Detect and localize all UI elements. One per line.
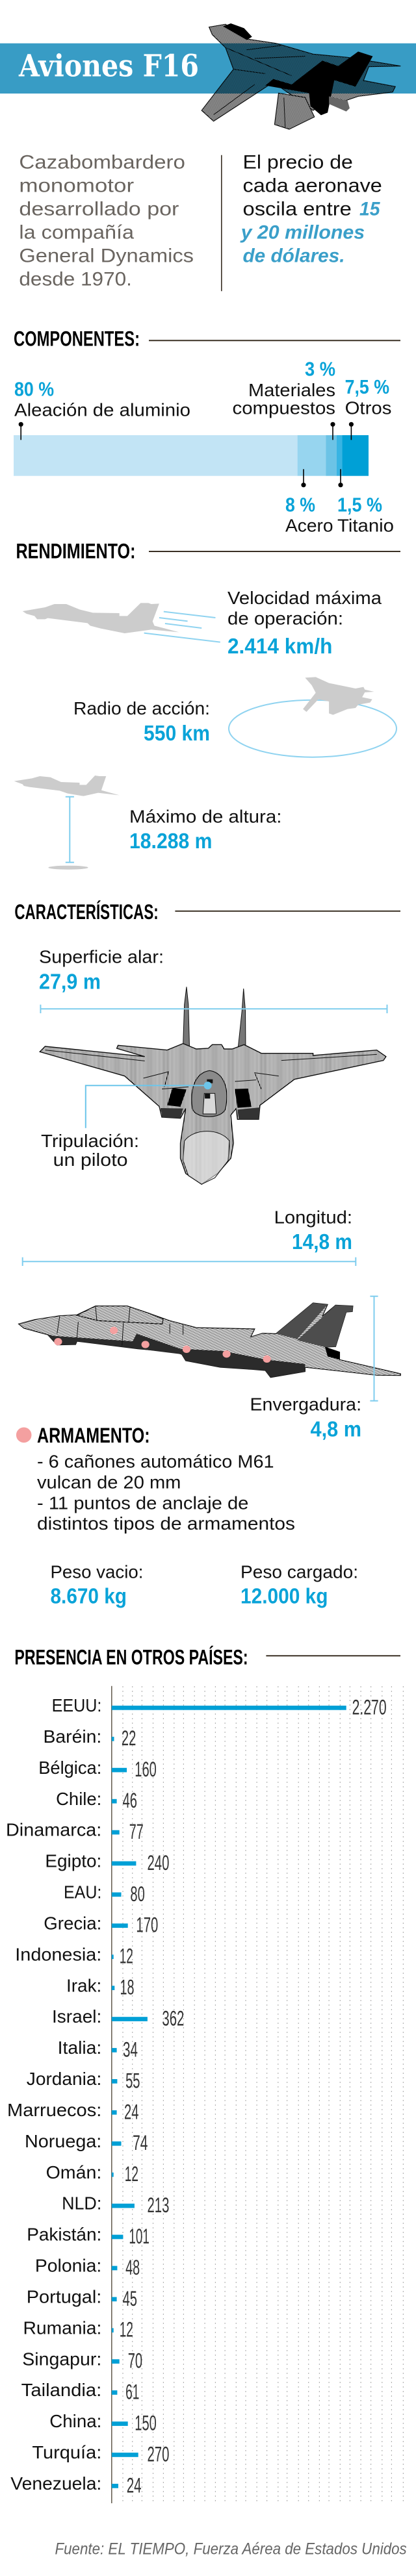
text block: superficie alar: 27,9 m: [39, 970, 101, 994]
text block: radio de accion: Radio de acción:: [73, 698, 210, 718]
text block: envergadura: Envergadura:: [250, 1395, 361, 1415]
text block: peso vacio: 8.670 kg: [51, 1584, 127, 1608]
bar chart: presence by country: Jordania:: [27, 2069, 101, 2089]
label: aluminio: 80 %: [14, 377, 54, 400]
text block: envergadura: 4,8 m: [311, 1417, 361, 1441]
heading: presencia en otros paises: PRESENCIA EN OTROS PAÍSES:: [14, 1646, 248, 1669]
bar chart: presence by country: Grecia:: [44, 1913, 101, 1933]
bar chart: presence by country: Pakistán:: [27, 2225, 101, 2245]
label: titanio: [337, 493, 394, 535]
label: materiales compuestos: 3 %: [305, 357, 335, 380]
label: materiales compuestos: Materiales: [248, 380, 335, 400]
text block: peso cargado: Peso cargado:: [240, 1561, 358, 1582]
bar chart: presence by country: 150: [135, 2411, 157, 2434]
text block: price: oscila entre: [243, 198, 352, 220]
text block: superficie alar: [39, 947, 164, 994]
text block: armamento: [16, 1424, 295, 1534]
bar chart: presence by country: 48: [125, 2256, 140, 2279]
text block: armamento: - 6 cañones automático M61: [37, 1451, 274, 1471]
bar chart: presence by country: 160: [135, 1758, 157, 1781]
bar chart: presence by country: Dinamarca:: [6, 1820, 101, 1840]
text block: armamento: vulcan de 20 mm: [37, 1472, 181, 1493]
callout: tripulacion: Tripulación:: [41, 1131, 139, 1151]
bar chart: presence by country: Egipto:: [45, 1851, 101, 1871]
text block: velocidad: [228, 588, 382, 658]
bar chart: presence by country: Baréin:: [43, 1726, 101, 1747]
bar chart: presence by country: 170: [136, 1913, 158, 1937]
text block: description: desde 1970.: [19, 268, 132, 290]
text block: armamento: - 11 puntos de anclaje de: [37, 1493, 248, 1513]
bar chart: presence by country: Tailandia:: [21, 2380, 101, 2400]
text block: velocidad: 2.414 km/h: [228, 634, 332, 658]
text block: price: de dólares.: [243, 245, 344, 266]
bar chart: presence by country: 80: [130, 1882, 145, 1906]
bar chart: presence by country: 2.270: [352, 1695, 387, 1719]
text block: armamento: distintos tipos de armamentos: [37, 1513, 295, 1534]
bar chart: presence by country: Singapur:: [22, 2349, 101, 2369]
text block: peso cargado: 12.000 kg: [240, 1584, 328, 1608]
icon: jet front view: [40, 987, 386, 1184]
text block: altura: [129, 807, 282, 853]
text block: price: El precio de: [243, 151, 353, 173]
bar chart: presence by country: Portugal:: [27, 2286, 101, 2307]
label: aluminio: [14, 377, 190, 420]
bar chart: presence by country: 101: [129, 2225, 150, 2248]
bar chart: presence by country: Turquía:: [32, 2442, 101, 2462]
bar chart: presence by country: 61: [125, 2380, 139, 2403]
text block: altura: Máximo de altura:: [129, 807, 282, 827]
icon: jet with altitude marker: [14, 776, 120, 870]
bar chart: presence by country: 45: [123, 2287, 137, 2310]
label: acero: [285, 493, 333, 535]
callout: tripulacion: [41, 1081, 212, 1170]
text block: description: monomotor: [19, 175, 134, 196]
text block: peso cargado: [240, 1561, 358, 1608]
heading: rendimiento: RENDIMIENTO:: [16, 539, 135, 562]
dimension: height line: [370, 1296, 378, 1401]
bar chart: presence by country: 12: [120, 1945, 133, 1968]
label: otros: 7,5 %: [345, 375, 389, 398]
bar chart: presence by country: 34: [123, 2038, 138, 2061]
bar chart: presence by country: Venezuela:: [10, 2473, 101, 2494]
text block: armamento: ARMAMENTO:: [37, 1424, 150, 1447]
label: titanio: Titanio: [337, 515, 394, 535]
bar chart: presence by country: Omán:: [46, 2162, 101, 2182]
bar chart: presence by country: [6, 1686, 403, 2503]
bar chart: presence by country: Israel:: [52, 2006, 101, 2027]
text block: altura: 18.288 m: [129, 829, 212, 853]
dimension: wingspan line: [40, 1005, 387, 1013]
bar chart: presence by country: 24: [127, 2473, 142, 2497]
label: acero: 8 %: [285, 493, 315, 516]
bar chart: presence by country: NLD:: [62, 2193, 101, 2214]
bar chart: presence by country: 18: [120, 1976, 134, 1999]
label: titanio: 1,5 %: [337, 493, 382, 516]
icon: jet side view with hardpoints: [19, 1303, 400, 1378]
text block: longitud: Longitud:: [274, 1207, 352, 1227]
heading: componentes: COMPONENTES:: [14, 327, 140, 351]
text block: longitud: 14,8 m: [292, 1230, 352, 1254]
label: otros: Otros: [345, 398, 391, 418]
bar chart: presence by country: Bélgica:: [38, 1758, 101, 1778]
label: materiales compuestos: [233, 357, 335, 418]
bar chart: presence by country: 270: [147, 2442, 169, 2466]
icon: header fighter jet: [202, 23, 400, 129]
bar chart: presence by country: 24: [124, 2100, 138, 2123]
bar chart: presence by country: 74: [133, 2131, 148, 2154]
label: otros: [345, 375, 391, 418]
text block: description: General Dynamics: [19, 245, 194, 266]
text block: description: la compañía: [19, 221, 134, 243]
bar chart: presence by country: 46: [123, 1789, 137, 1812]
bar chart: presence by country: Italia:: [58, 2038, 101, 2058]
title banner: [0, 44, 416, 94]
text block: price: cada aeronave: [243, 175, 382, 196]
callout: tripulacion: un piloto: [53, 1150, 128, 1170]
bar chart: presence by country: EEUU:: [52, 1695, 101, 1715]
text block: radio de accion: [73, 698, 210, 745]
text block: longitud: [274, 1207, 352, 1254]
text block: velocidad: Velocidad máxima: [228, 588, 382, 608]
bar chart: presence by country: Indonesia:: [15, 1944, 101, 1964]
label: acero: Acero: [285, 515, 333, 535]
bar chart: presence by country: Marruecos:: [7, 2100, 101, 2120]
chart: composition stacked bar: [14, 422, 369, 487]
bar chart: presence by country: Irak:: [66, 1975, 101, 1995]
text block: description: desarrollado por: [19, 198, 179, 220]
bar chart: presence by country: 213: [147, 2193, 169, 2217]
text block: price: y 20 millones: [240, 221, 365, 243]
bar chart: presence by country: Rumania:: [23, 2317, 101, 2338]
label: materiales compuestos: compuestos: [233, 398, 335, 418]
text block: superficie alar: Superficie alar:: [39, 947, 164, 967]
title banner: Aviones F16: [18, 48, 199, 84]
bar chart: presence by country: Noruega:: [25, 2131, 101, 2151]
text block: price: [240, 151, 382, 266]
text block: velocidad: de operación:: [228, 609, 343, 629]
bar chart: presence by country: 55: [125, 2069, 140, 2092]
bar chart: presence by country: Polonia:: [35, 2256, 101, 2276]
bar chart: presence by country: 240: [147, 1851, 169, 1875]
bar chart: presence by country: Chile:: [56, 1789, 101, 1809]
text block: envergadura: [250, 1395, 361, 1441]
text block: radio de accion: 550 km: [144, 721, 210, 745]
text block: price: 15: [359, 198, 381, 220]
bar chart: presence by country: 362: [162, 2007, 184, 2030]
heading: caracteristicas: CARACTERÍSTICAS:: [14, 900, 159, 924]
label: aluminio: Aleación de aluminio: [14, 400, 190, 420]
icon: jet circling on ellipse: [229, 677, 396, 757]
text block: description: [19, 151, 194, 290]
bar chart: presence by country: EAU:: [64, 1882, 101, 1902]
icon: jet silhouette with speed lines: [23, 603, 220, 642]
dimension: length line: [23, 1257, 356, 1266]
bar chart: presence by country: 70: [128, 2349, 142, 2373]
bar chart: presence by country: 12: [120, 2318, 133, 2342]
bar chart: presence by country: 12: [125, 2162, 138, 2186]
bar chart: presence by country: China:: [49, 2411, 101, 2431]
text block: peso vacio: Peso vacio:: [51, 1561, 143, 1582]
text block: peso vacio: [51, 1561, 143, 1608]
text block: description: Cazabombardero: [19, 151, 185, 173]
bar chart: presence by country: 77: [129, 1820, 144, 1843]
bar chart: presence by country: 22: [122, 1726, 136, 1750]
